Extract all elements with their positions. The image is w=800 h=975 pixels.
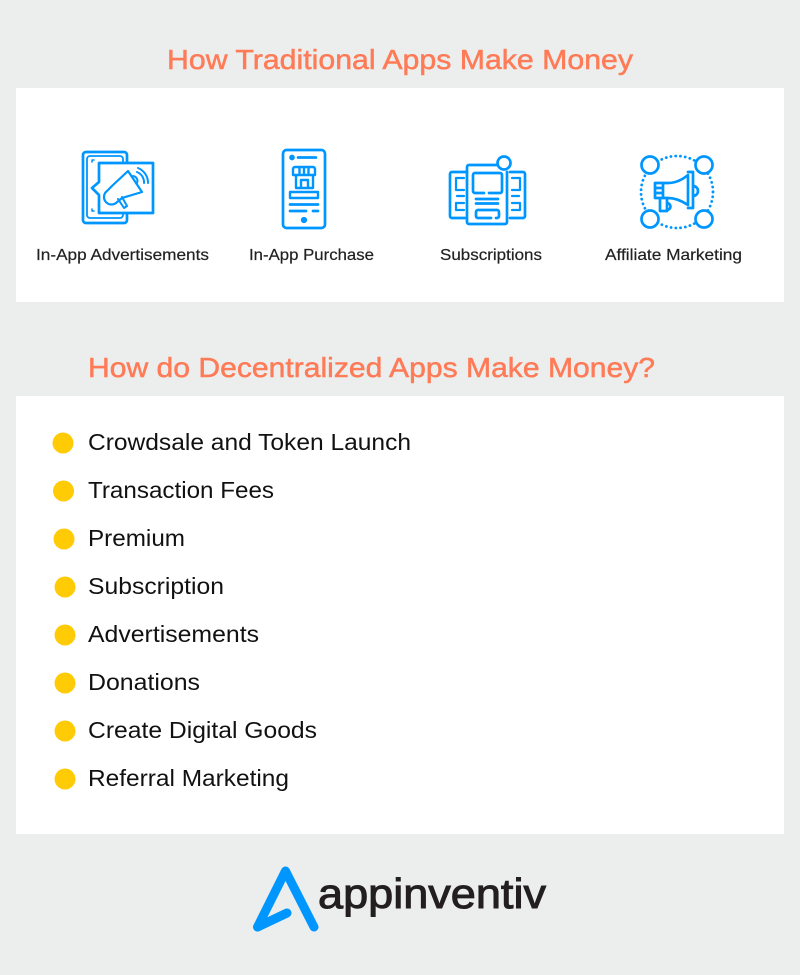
- icon: in-app advertisements: [83, 152, 153, 223]
- label: in-app advertisements: In-App Advertisements: [36, 247, 209, 264]
- list item: crowdsale: Crowdsale and Token Launch: [88, 429, 411, 455]
- panel: decentralized apps: [16, 396, 784, 834]
- list item: premium: [54, 525, 185, 551]
- logo wordmark: appinventiv: [318, 870, 546, 917]
- label: in-app purchase: In-App Purchase: [249, 247, 374, 264]
- panel: traditional apps: [16, 88, 784, 302]
- list item: donations: Donations: [88, 669, 200, 695]
- list item: create digital goods: Create Digital Goods: [88, 717, 317, 743]
- list item: premium: Premium: [88, 525, 185, 551]
- label: subscriptions: Subscriptions: [440, 247, 542, 264]
- icon: logo mark: [258, 871, 314, 927]
- icon: in-app purchase: [283, 150, 325, 228]
- list item: transaction fees: Transaction Fees: [88, 477, 274, 503]
- list item: subscription: Subscription: [88, 573, 224, 599]
- logo: appinventiv: [258, 870, 546, 927]
- icon: subscriptions: [450, 156, 525, 224]
- heading: traditional apps: How Traditional Apps Make Money: [167, 44, 633, 75]
- label: affiliate marketing: Affiliate Marketing: [605, 247, 742, 264]
- heading: decentralized apps: How do Decentralized Apps Make Money?: [88, 352, 655, 383]
- list item: advertisements: Advertisements: [88, 621, 259, 647]
- list item: referral marketing: Referral Marketing: [88, 765, 289, 791]
- icon: affiliate marketing: [641, 156, 713, 228]
